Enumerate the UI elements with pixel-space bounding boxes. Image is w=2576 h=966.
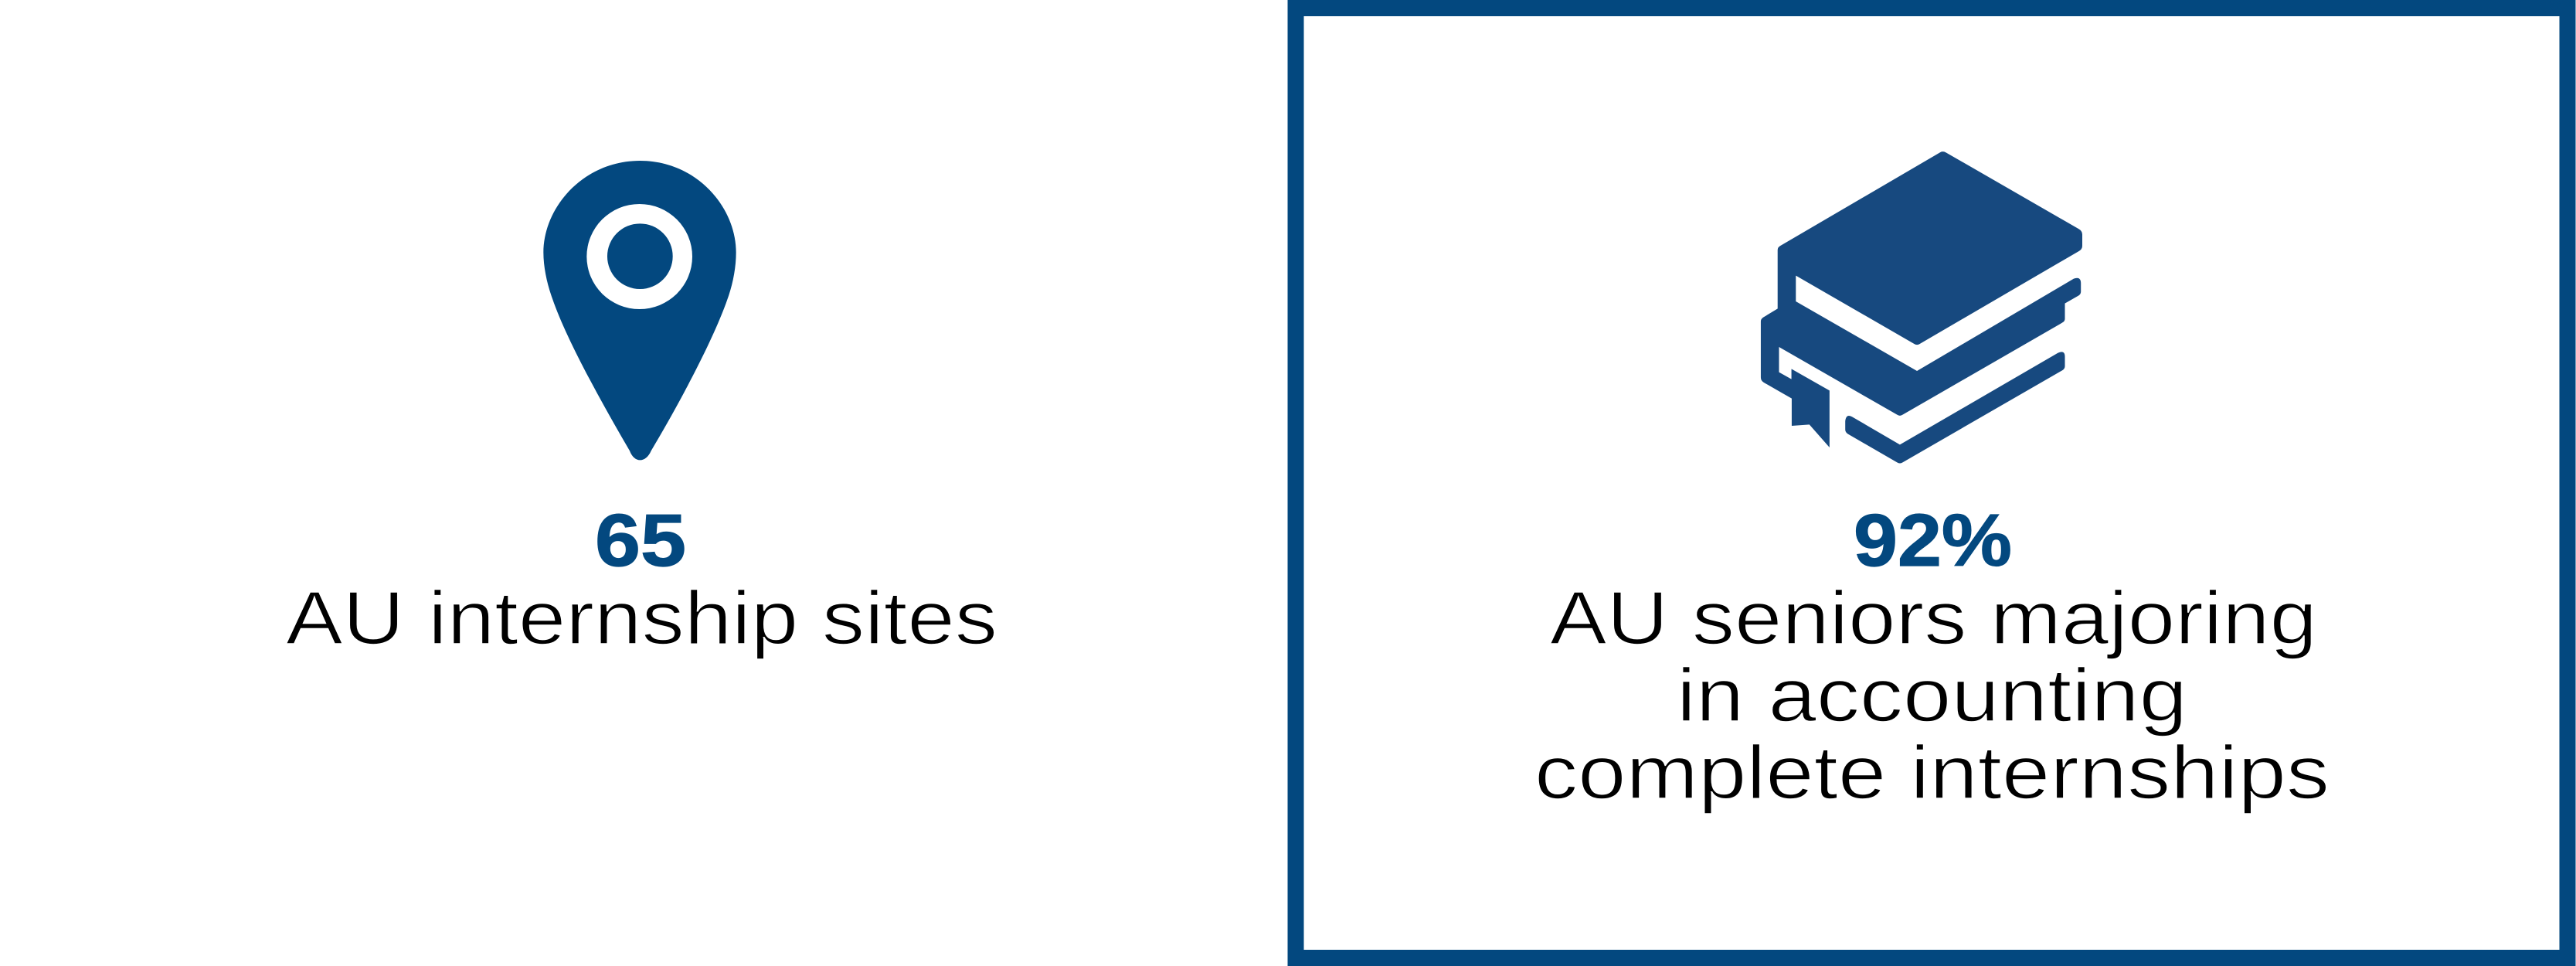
label: AU seniors majoring in accounting complete internships: [1534, 576, 2330, 815]
statistic: 92%: 92%: [1854, 499, 2012, 582]
panel border: [1296, 8, 2568, 958]
icon: stack of books: [1761, 151, 2082, 463]
label: AU seniors majoring in accounting complete internships: complete internships: [1534, 730, 2330, 815]
statistic: 65: 65: [595, 499, 686, 582]
panel: AU internship sites: [286, 161, 997, 660]
label: AU internship sites: AU internship sites: [286, 576, 997, 660]
label: AU seniors majoring in accounting complete internships: AU seniors majoring: [1550, 576, 2317, 660]
icon: map pin: [543, 161, 736, 460]
label: AU seniors majoring in accounting complete internships: in accounting: [1677, 653, 2187, 737]
panel: AU seniors majoring in accounting: [1296, 8, 2568, 958]
